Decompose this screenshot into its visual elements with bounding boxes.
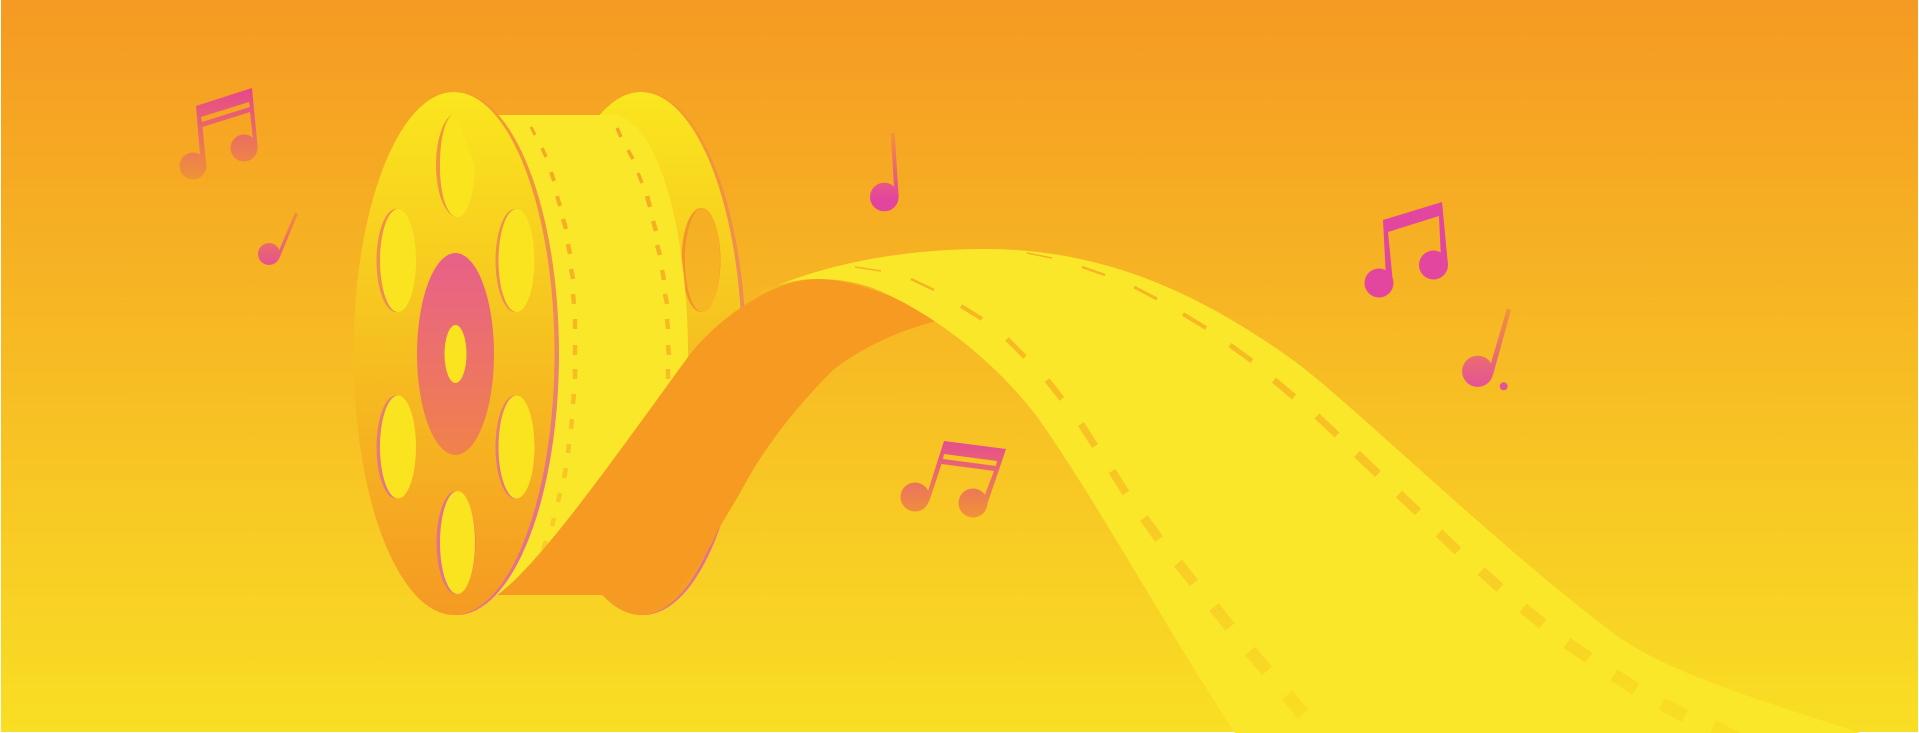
icon: small single note left [258, 212, 298, 265]
icon: double music note top left [180, 88, 258, 180]
centre hub [417, 253, 494, 455]
icon: back reel [540, 92, 746, 615]
lower left hole [376, 396, 416, 498]
lower right hole [496, 396, 534, 498]
reel rim and face [354, 92, 559, 615]
icon: double music note right [1364, 202, 1448, 298]
bottom hole [436, 491, 476, 594]
film strip wrapped between reels [470, 115, 688, 595]
upper right hole [496, 209, 534, 312]
ribbon perforations: inner row [855, 267, 1303, 714]
top hole [436, 113, 475, 217]
ribbon perforations: outer row [1027, 253, 1737, 733]
icon: single note centre top [870, 133, 899, 211]
icon: double music note centre [900, 441, 1006, 518]
icon: dotted note right [1462, 308, 1511, 390]
upper left hole [376, 209, 416, 312]
film ribbon front side [760, 249, 1860, 733]
film ribbon back side [497, 279, 940, 610]
icon: front film reel [354, 92, 559, 615]
